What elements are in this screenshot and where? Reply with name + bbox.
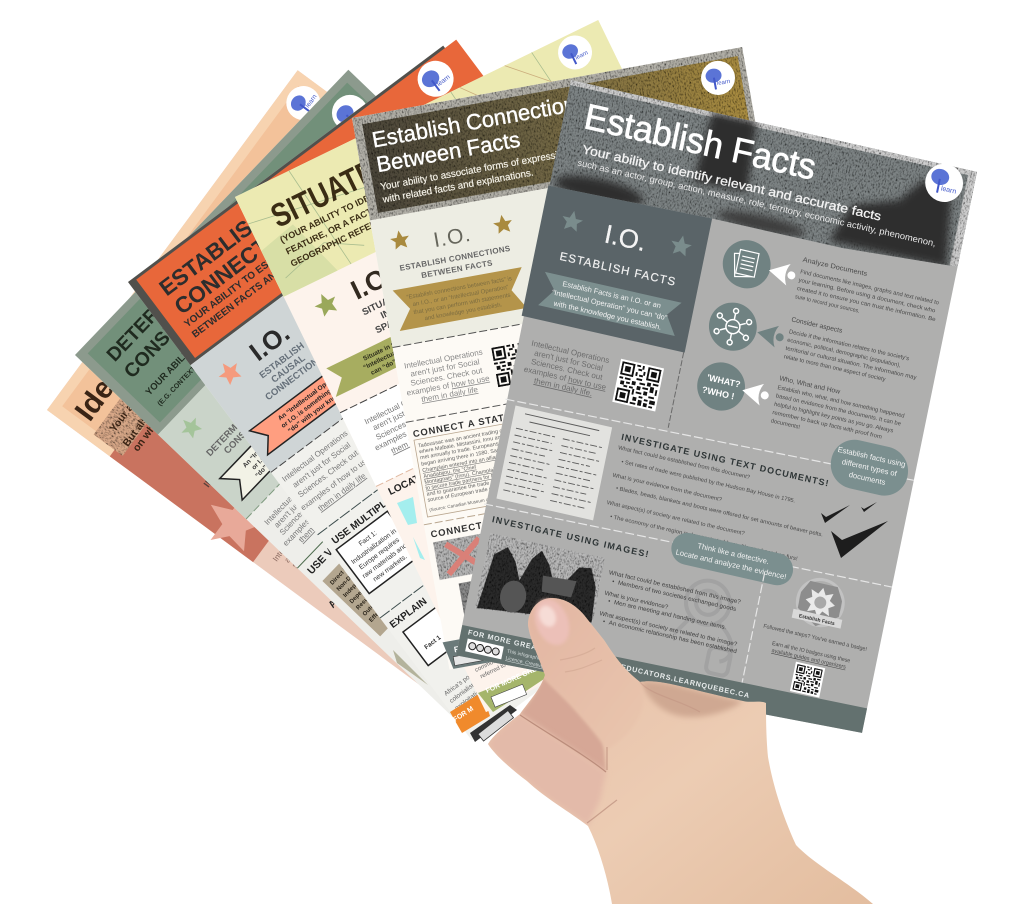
text: Identify intro xyxy=(271,494,342,575)
footer strip: black xyxy=(470,705,517,742)
text box: Tadoussac source: Tadoussac was an ancient trading centre xyxy=(418,426,515,449)
text: Analyze Documents: Find documents like images, graphs and text related to xyxy=(800,269,939,307)
text: Determine intro: Intellectual Operations xyxy=(263,463,324,527)
image: tan document: Outcome xyxy=(362,594,385,618)
heading: Situate: SITUATE xyxy=(265,152,382,235)
logo: Situate card: learn xyxy=(575,50,589,61)
icon: olive star xyxy=(311,289,341,319)
box: Fact 1: new markets. xyxy=(372,553,409,583)
card: Establish Causal Connections (orange card) xyxy=(128,37,798,742)
text: text document questions: • The economy of the region is demonstrated here. It's one based on furs! xyxy=(609,514,799,563)
text: commons note: commons xyxy=(474,657,500,674)
footer: orange band: FOR M xyxy=(452,705,475,724)
text: intro: Intellectual Operations xyxy=(531,339,610,365)
card: Determine Consequences (sage card) xyxy=(75,70,745,736)
header image: engraving xyxy=(550,80,977,267)
text: connections label: ESTABLISH CONNECTIONS xyxy=(399,244,512,273)
heading: Establish Facts label: ESTABLISH FACTS xyxy=(558,251,677,289)
icon: green star xyxy=(176,412,205,441)
text: text document questions: What fact could be established from this document? xyxy=(617,445,750,481)
icon: what who: ?WHO ! xyxy=(701,384,735,402)
image: tan document: Independent xyxy=(343,569,372,599)
text: commons note xyxy=(474,655,508,681)
text: intro: aren't just for Social xyxy=(534,349,604,373)
subtitle: Determine card: (E.G. CONTEXT, CAUSES) xyxy=(157,340,221,408)
box: Fact 1 lower: Fact 1 xyxy=(423,634,443,651)
text: Analyze Documents: sure to record your sources. xyxy=(794,294,860,315)
text: Who, What and How: Who, What and How xyxy=(779,375,841,396)
text: Consider aspects: Consider aspects xyxy=(791,317,843,335)
icon: salmon star xyxy=(214,357,245,388)
image: tan triangle xyxy=(393,650,428,685)
text: Who, What and How: remember to back up facts with proof from xyxy=(772,410,882,441)
logo: front card xyxy=(922,160,966,206)
heading: Use Multiple: USE MULTIPLE xyxy=(330,494,395,547)
text: Analyze Documents xyxy=(794,257,942,332)
text box: Tadoussac source: Anadabijou, the “Chief xyxy=(423,464,477,480)
box: Fact 1: Industrialization in xyxy=(350,528,398,566)
logo: causal card xyxy=(410,54,461,104)
logo: connections card xyxy=(698,58,738,98)
subtitle: Identify card: Your ability to name xyxy=(108,347,176,434)
hand creases xyxy=(520,648,700,823)
text: Situate intro xyxy=(361,382,458,461)
text: intro: Sciences. Check out xyxy=(530,357,604,382)
footer band: This infographic is licensed xyxy=(506,649,566,668)
heading: Investigate using text documents: INVESTIGATE USING TEXT DOCUMENTS! xyxy=(620,432,829,488)
subtitle: Identify card: on what matters xyxy=(131,382,188,454)
ribbon: Determine definition xyxy=(220,375,342,500)
QR code: connections card xyxy=(491,341,538,387)
logo: Identify card xyxy=(280,79,327,127)
text: causal label: CONNECTIONS xyxy=(263,352,326,403)
heading: connections I.O.: I.O. xyxy=(432,223,473,252)
text: image questions: • xyxy=(602,619,606,625)
ribbon: definition: Establish Facts is an I.O. or an xyxy=(562,279,662,310)
text box: Tadoussac source: source of European trade goods. xyxy=(427,484,506,504)
upper finger shading xyxy=(520,677,606,772)
text: intro xyxy=(521,338,613,401)
ribbon: connections definition: “Establish connections between facts” is xyxy=(406,276,512,301)
text: Situate label: SPACE xyxy=(374,312,407,336)
text: image questions: Members of two societies exchanged goods xyxy=(617,580,737,613)
image: tan document: Dependent xyxy=(349,579,375,605)
text: causal label xyxy=(251,335,326,403)
text: Identify intro: Intellectual Operations xyxy=(271,494,326,563)
text: Determine intro xyxy=(261,461,353,554)
heading: Connect: CONNECT IMAGES xyxy=(430,512,529,541)
text box: Tadoussac source: Champlain entered into an alliance xyxy=(422,453,505,474)
icon: gold stars xyxy=(389,210,514,253)
heading: Connect a Statement: CONNECT A STATEMENT xyxy=(412,406,542,440)
text: Analyze Documents: Analyze Documents xyxy=(802,257,868,278)
subtitle: ability: Your ability to identify relevant and accurate facts xyxy=(581,142,882,224)
heading: Locate: LOCATE xyxy=(387,470,428,498)
text: connections intro: them in daily life xyxy=(421,385,479,404)
ribbon: causal definition: “do” with your knowledge. xyxy=(287,380,357,435)
text: Consider aspects: territorial or cultural situation. The information may xyxy=(785,346,917,381)
text: Situate intro: them in daily life xyxy=(390,422,446,456)
card: Identify (back peach card) xyxy=(43,70,732,737)
subtitle: Determine card: YOUR ABILITY TO ASSESS xyxy=(144,302,237,398)
heading: Establish Facts: Establish Facts xyxy=(581,95,820,188)
box: Fact 1 xyxy=(336,511,420,594)
text: Determine label: DETERMINE xyxy=(204,411,251,459)
callout: Think like a detective: Locate and analyze the evidence! xyxy=(675,548,787,581)
text: image questions: What is your evidence? xyxy=(604,591,669,611)
text: Africa's colonialism xyxy=(443,670,488,712)
thumb xyxy=(528,598,644,750)
icon: aspects globe xyxy=(705,298,761,355)
text: causal intro: examples of how to use xyxy=(299,454,372,512)
text: Situate label: IN xyxy=(379,307,392,321)
icon: what who: 'WHAT? xyxy=(706,372,741,390)
heading: Investigate using images: INVESTIGATE USING IMAGES! xyxy=(491,514,649,559)
arrow: aspects xyxy=(755,321,786,349)
ribbon: connections definition: an I.O., or an “Intellectual Operation” xyxy=(412,285,509,308)
text: badge note: Earn all the IO badges using these xyxy=(771,641,851,665)
text box: Tadoussac source: and to guarantee the trade as a xyxy=(426,478,501,498)
text: Situate label xyxy=(360,291,411,338)
ribbon: Determine definition: An “Intellectual Operation” xyxy=(242,404,304,469)
card: Situate in Space (map card) xyxy=(235,20,849,741)
callout: Think like a detective: Think like a detective. xyxy=(697,541,770,566)
logo: Determine card xyxy=(325,87,375,138)
text: causal intro xyxy=(279,427,379,521)
icon: documents xyxy=(718,235,775,293)
text: image questions: • xyxy=(611,579,615,585)
palm shadow xyxy=(640,681,743,717)
lower finger shading xyxy=(488,714,606,826)
ribbon: Situate definition xyxy=(323,299,481,397)
text: text document questions: • Blades, beads, blankets and boots were offered for set amounts of beaver pelts. xyxy=(615,486,824,539)
heading: causal I.O.: I.O. xyxy=(244,318,295,367)
text: Who, What and How: documents! xyxy=(770,418,801,431)
text: IDENTIFY label: IDENTIFY xyxy=(202,448,237,490)
heading: Identify: Identify xyxy=(69,321,159,427)
image: handwritten trade ledger xyxy=(496,406,612,520)
text: connections intro xyxy=(401,347,492,407)
text: commons note: referred to xyxy=(480,662,508,680)
panel: I.O. xyxy=(522,182,712,353)
text: Identify section letter: A xyxy=(327,598,340,610)
image: crossed out engraving xyxy=(433,532,499,580)
text: Determine intro: examples of how to use xyxy=(281,481,346,548)
logo: Determine card: learn xyxy=(351,106,366,121)
text: image questions: What fact could be established from this image? xyxy=(608,570,742,606)
text box: Tadoussac source: Montagnais” (Innu). Champlain was able xyxy=(424,463,520,486)
subtitle: causal card: BETWEEN FACTS AND EVENTS xyxy=(190,240,319,340)
callout: Establish facts using different types: Establish facts using xyxy=(837,445,906,469)
ribbon: causal definition xyxy=(250,343,384,455)
text: image questions xyxy=(597,570,747,655)
image: tan document: Result xyxy=(355,594,373,611)
callout: Establish facts using different types: documents xyxy=(848,470,886,487)
text: Consider aspects: economic, political, demographic (population), xyxy=(787,338,901,369)
icon: star on Identify card xyxy=(194,482,271,560)
box: Fact 1 lower xyxy=(403,596,476,666)
heading: I.O.: I.O. xyxy=(602,218,649,257)
subtitle: connections card: with related facts and explanations. xyxy=(381,168,534,206)
heading: Use Visuals: USE VISUALS xyxy=(305,518,362,577)
text: Situate label: SITUATE xyxy=(360,291,401,318)
logo: Situate card xyxy=(552,30,598,75)
text: causal label: ESTABLISH xyxy=(258,340,307,381)
text: Situate intro: Intellectual Operations xyxy=(363,383,439,426)
subtitle: Identify card xyxy=(105,347,201,456)
footer: orange band xyxy=(450,692,490,733)
footer: green band xyxy=(478,662,547,712)
text: Consider aspects: Decide if the information relates to the society's xyxy=(788,329,910,362)
image: tan document: Non-Direct xyxy=(336,566,362,593)
image: tan document: Direct Manner xyxy=(330,553,362,586)
text: badge note: Followed the steps? You've earned a badge! xyxy=(763,624,868,653)
heading: Explain: EXPLAIN xyxy=(388,596,429,631)
logo: causal card: learn xyxy=(436,73,452,88)
text: image questions: What aspect(s) of society are related to the image? xyxy=(599,611,738,648)
heading: Situate I.O.: I.O. xyxy=(346,259,398,306)
ribbon: connections definition xyxy=(393,267,529,331)
icon: what who xyxy=(693,358,749,415)
text: causal intro: Sciences. Check out xyxy=(296,448,361,499)
text: text document questions: What is your evidence from the document? xyxy=(612,473,722,503)
image: trade engraving xyxy=(475,532,606,634)
ribbon: connections definition: and knowledge you establish. xyxy=(424,302,503,322)
footer band xyxy=(456,617,867,747)
arrow: who xyxy=(740,379,771,407)
text: Consider aspects: relate to more than one aspect of society xyxy=(783,354,886,383)
ribbon: connections definition: that you can perform with statements xyxy=(413,293,511,316)
subtitle: Identify card: But also to focus xyxy=(120,373,181,449)
ribbon: Determine definition: or I.O. is something you xyxy=(251,413,307,471)
footer band: FOR MORE GREAT RESOURCES VISIT EDUCATORS.LEARNQUEBEC.CA xyxy=(467,628,750,700)
ribbon: causal definition: or I.O. is something you can xyxy=(280,372,354,430)
text: connections intro: examples of how to use xyxy=(406,374,491,398)
box: Fact 1: Fact 1: xyxy=(358,530,379,548)
subtitle: connections card: Your ability to associate forms of expression xyxy=(380,148,569,193)
text: connections intro: Intellectual Operations xyxy=(403,348,483,371)
QR code: badge xyxy=(790,662,825,698)
text box: Tadoussac source: met annually to trade. Europeans xyxy=(420,441,499,461)
fingers and shading xyxy=(488,598,743,826)
text: Situate intro: examples of how to use xyxy=(373,407,453,453)
text: causal intro: aren't just for Social xyxy=(291,440,352,490)
logo: front card: learn xyxy=(940,185,957,196)
text: Determine intro: them in daily life xyxy=(297,496,344,544)
text: intro: them in daily life. xyxy=(533,376,593,398)
heading: Establish Connections Between Facts: Between Facts xyxy=(374,127,522,177)
hand holding the cards xyxy=(488,594,873,904)
logo: connections card: learn xyxy=(717,79,731,87)
ribbon: definition: with the knowledge you establish. xyxy=(552,298,662,332)
subtitle: examples: such as an actor, group, action, measure, role, territory, economic activity, phenomenon, xyxy=(577,158,937,248)
subtitle: Situate card: GEOGRAPHIC REFERENCE) xyxy=(289,206,403,269)
text: Situate intro: aren't just for Social xyxy=(371,394,438,432)
text: Who, What and How xyxy=(770,375,907,453)
callout: Establish facts using different types: different types of xyxy=(841,457,898,478)
heading: Establish Causal Connections: CONNECTIONS xyxy=(170,200,318,319)
text box: Tadoussac source: where Malbaie, Mistassini, Innu and others xyxy=(418,431,521,456)
text: Identify intro: aren't just for xyxy=(283,522,317,564)
icon: black check marks xyxy=(821,502,888,558)
text: Africa's colonialism: Africa's post- xyxy=(443,670,477,698)
image: tan document: Effect xyxy=(368,608,384,624)
ribbon: Situate definition: “Intellectual Operation” you xyxy=(362,327,443,371)
ribbon: Determine definition: “do” with your knowledge xyxy=(254,416,315,479)
text: Africa's colonialism: colonialism xyxy=(448,680,478,705)
text box: Tadoussac source: (Source: Canadian Museum of History) xyxy=(429,494,507,513)
text: connections intro: aren't just for Social xyxy=(410,357,480,379)
subtitle: causal card: YOUR ABILITY TO ESTABLISH LINKS xyxy=(182,214,332,330)
text: causal intro: them in daily life xyxy=(316,471,368,513)
subtitle: Situate card: (YOUR ABILITY TO IDENTIFY A PLACE, xyxy=(278,162,434,245)
image: tan document xyxy=(322,516,442,636)
text: text document questions: What aspect(s) of society are related to the document? xyxy=(606,500,745,537)
text: Determine intro: Sciences. Check out xyxy=(278,477,335,537)
text box: Tadoussac source: began arriving there in 1580. Samuel de xyxy=(421,445,516,468)
footer: grey band xyxy=(443,571,840,670)
text: Africa's colonialism: exploitation xyxy=(454,686,485,712)
text: badge note: available guides and organizers xyxy=(771,648,847,671)
footer: grey band: FOR MORE xyxy=(453,638,498,654)
box: Fact 1: Europe requires xyxy=(358,536,401,571)
footer band: Licence. Creative Commons xyxy=(505,655,568,675)
badge: lower creative commons xyxy=(478,711,513,741)
arrow: documents xyxy=(767,260,797,287)
callout: Establish facts using different types xyxy=(826,435,912,500)
map: cyan shapes xyxy=(397,497,425,560)
text box: Tadoussac source xyxy=(414,417,556,517)
ribbon: definition: “Intellectual Operation” you can “do” xyxy=(551,287,669,322)
text: Who, What and How: helpful to highlight key points as you go. Always xyxy=(773,402,894,435)
text: text document questions xyxy=(604,445,832,567)
text: Determine label: CONSEQUENCES xyxy=(222,390,286,456)
ribbon: Situate definition: can “do” with knowledge xyxy=(370,336,443,377)
icon: Establish Facts badge xyxy=(791,575,849,632)
text: connections intro: Sciences. Check out xyxy=(410,366,484,388)
text: Determine label xyxy=(204,383,286,467)
icon: Establish Facts badge: Establish Facts xyxy=(798,613,835,627)
callout: Think like a detective xyxy=(668,530,796,588)
text: Consider aspects xyxy=(783,317,923,390)
text: Who, What and How: Establish who, what, and how something happened xyxy=(777,385,905,420)
text: image questions: • xyxy=(607,599,611,605)
card: Establish Facts (front grey card) xyxy=(451,78,979,747)
heading: Determine Consequences: DETERMINE xyxy=(102,268,198,366)
heading: Determine Consequences: CONSEQUENCES xyxy=(120,248,250,383)
heading: Establish Connections Between Facts: Establish Connections xyxy=(370,89,589,153)
logo: Identify card: learn xyxy=(304,93,319,109)
ribbon: Situate definition: Situate in Space is an I.O. xyxy=(362,322,436,363)
text: text document questions: • Set rates of trade were published by the Hudson Bay House in 1795. xyxy=(621,459,796,505)
text: causal intro: Intellectual Operations xyxy=(280,429,349,484)
thumbnail xyxy=(528,594,576,650)
text: Identify intro: Social Sciences xyxy=(291,520,332,570)
text: Determine intro: aren't just for Social xyxy=(272,473,327,530)
ribbon: definition xyxy=(538,272,682,336)
text: Who, What and How: based on evidence from the documents. It can be xyxy=(775,393,901,428)
text: Analyze Documents: your learning. Before using a document, check who xyxy=(798,278,936,314)
subtitle: Situate card: FEATURE, OR A FACT USING A xyxy=(284,189,410,257)
text: connections label: BETWEEN FACTS xyxy=(421,258,494,280)
text: intro: examples of how to use xyxy=(523,365,607,392)
heading: Establish Causal Connections: ESTABLISH CAUSAL xyxy=(155,145,350,301)
text: badge note xyxy=(758,624,868,675)
card: Establish Connections Between Facts (gold card) xyxy=(350,47,840,670)
text: Analyze Documents: created it to ensure you can trust the information. Be xyxy=(796,286,936,323)
text: Situate intro: Sciences. Check out xyxy=(374,402,445,442)
text: causal label: CAUSAL xyxy=(269,353,308,385)
image: second engraving xyxy=(459,576,504,619)
icon: magnifier watermark xyxy=(668,575,745,677)
footer: green band: FOR MORE GREAT xyxy=(485,662,547,695)
box: Fact 1: raw materials and xyxy=(361,542,409,580)
ribbon: causal definition: An “Intellectual Operation” xyxy=(277,367,348,422)
QR code: intro xyxy=(612,359,664,412)
text: image questions: Men are meeting and handing over items. xyxy=(613,600,727,631)
text box: Tadoussac source: to secure trade partners for France xyxy=(425,471,508,492)
text: image questions: An economic relationship has been established xyxy=(608,620,737,655)
icon: stars xyxy=(560,209,693,257)
